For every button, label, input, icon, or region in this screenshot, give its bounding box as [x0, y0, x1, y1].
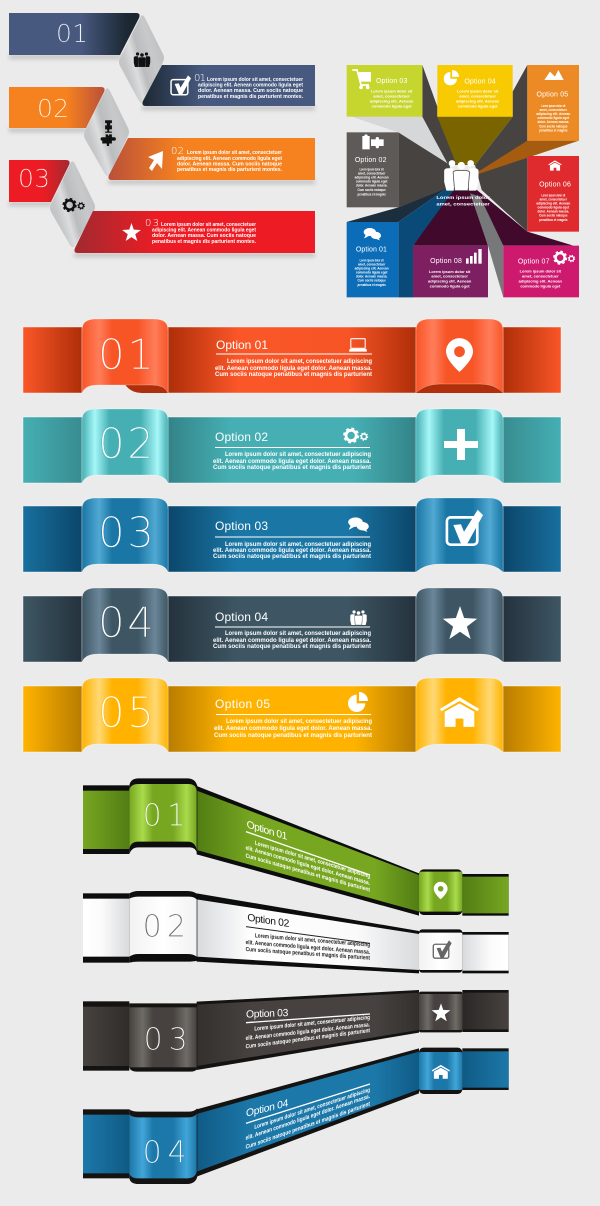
icon: house: [440, 697, 479, 727]
title: Option 03: [215, 519, 268, 533]
box 02: [347, 132, 398, 207]
box 01: Lorem ipsum dolor sit: [360, 258, 384, 262]
band 01: [23, 319, 561, 393]
body text: [213, 541, 372, 560]
icon: puzzle: [101, 120, 116, 146]
icon: laptop: [349, 339, 367, 352]
box 08: Lorem ipsum dolor sit: [429, 270, 471, 274]
body text: Cum sociis natoque penatibus et magnis dis parturient: [215, 371, 373, 378]
box 04: amet, consectetuer: [459, 94, 497, 98]
number: 05: [98, 688, 154, 737]
rule: [246, 1084, 370, 1123]
body text: Cum sociis natoque penatibus et magnis dis parturient: [246, 947, 370, 962]
body text: elit. Aenean commodo ligula eget dolor. Aenean massa.: [246, 1022, 370, 1042]
icon: house: [432, 1065, 450, 1079]
body text: Cum sociis natoque penatibus et magnis dis parturient: [246, 1028, 370, 1050]
body text: [246, 840, 370, 894]
title: Option 02: [215, 430, 268, 444]
box 07: commodo ligula eget: [520, 285, 561, 289]
box 02: Lorem ipsum dolor sit: [360, 168, 384, 172]
box 05: amet, consectetuer: [540, 108, 567, 112]
icon: speech bubbles: [364, 228, 381, 240]
box 01: [347, 222, 398, 297]
text block 02: Lorem ipsum dolor sit amet, consectetuer: [187, 150, 282, 156]
ribbon 02 white: [83, 891, 509, 973]
box 05: adipiscing elit. Aenean: [536, 112, 570, 116]
box 06: [527, 156, 579, 232]
box 04: Lorem ipsum dolor sit: [457, 89, 499, 93]
box 08: Option 08: [430, 258, 462, 265]
box 02: Cum sociis natoque: [357, 188, 386, 192]
box 02: dolor. Aenean massa.: [356, 184, 387, 188]
ribbon step 02: [9, 87, 315, 180]
body text: Lorem ipsum dolor sit amet, consectetuer adipiscing: [255, 933, 370, 949]
box 06: adipiscing elit. Aenean: [536, 201, 570, 205]
rule: [216, 354, 372, 355]
icon: people: [350, 610, 367, 625]
title: Option 05: [215, 697, 270, 711]
icon: people: [134, 52, 150, 67]
body text: Cum sociis natoque penatibus et magnis dis parturient: [213, 643, 372, 650]
box 01: amet, consectetuer: [358, 262, 386, 266]
body text: elit. Aenean commodo ligula eget dolor. Aenean massa.: [246, 1093, 370, 1142]
center text: [436, 195, 490, 207]
box 02: adipiscing elit. Aenean: [355, 176, 389, 180]
icon: pin: [434, 882, 448, 899]
box 07: adipiscing elit. Aenean: [519, 279, 562, 283]
box 02: Option 02: [355, 157, 387, 164]
body text: Lorem ipsum dolor sit amet, consectetuer adipiscing: [254, 1086, 370, 1131]
rule: [246, 1014, 370, 1023]
box 03: Option 03: [376, 78, 407, 85]
title: Option 02: [247, 913, 290, 930]
box 03: Lorem ipsum dolor sit: [371, 89, 413, 93]
rule: [246, 927, 370, 943]
icon: star: [122, 223, 141, 241]
box 02: amet, consectetuer: [358, 172, 386, 176]
title: Option 01: [216, 338, 268, 352]
text block 03: penatibus et magnis dis parturient montes.: [152, 239, 257, 245]
body text: Cum sociis natoque penatibus et magnis dis parturient: [213, 464, 372, 471]
text block 01: Lorem ipsum dolor sit amet, consectetuer: [207, 77, 303, 83]
icon: plus: [444, 429, 478, 460]
ribbon 01 green: [83, 778, 509, 916]
orange wedge: [478, 141, 579, 174]
box 01: Cum sociis natoque: [357, 279, 386, 283]
number: 01: [98, 330, 154, 379]
box 08: amet, consectetuer: [431, 275, 469, 279]
box 07: [503, 246, 579, 297]
icon: mountains: [544, 70, 564, 80]
body text: elit. Aenean commodo ligula eget dolor. Aenean massa.: [213, 458, 371, 465]
yellow wedge: [437, 117, 513, 165]
icon: gears: [554, 252, 575, 264]
box 02: penatibus et magnis: [357, 192, 386, 196]
dark wedges: [422, 65, 462, 165]
rule: [246, 832, 370, 875]
text block 03: Lorem ipsum dolor sit amet, consectetuer: [161, 222, 256, 228]
body text: elit. Aenean commodo ligula eget dolor. Aenean massa.: [214, 725, 372, 732]
light floor: [347, 115, 450, 167]
body text: Lorem ipsum dolor sit amet, consectetuer adipiscing: [225, 541, 371, 548]
box 07: amet, consectetuer: [522, 275, 559, 279]
text block 02: adipiscing elit. Aenean commodo ligula eget: [177, 156, 282, 162]
body text: Cum sociis natoque penatibus et magnis dis parturient: [246, 852, 370, 894]
box 01: adipiscing elit. Aenean: [355, 266, 389, 270]
plum wedges: [413, 188, 573, 246]
box 02: commodo ligula eget: [356, 180, 388, 184]
box 05: dolor. Aenean massa.: [537, 120, 569, 124]
title: Option 01: [247, 819, 287, 843]
body text: [215, 358, 373, 378]
box 03: [347, 65, 422, 117]
icon: cart: [352, 70, 371, 88]
number 02: 02: [37, 94, 69, 123]
box 05: Lorem ipsum dolor sit: [541, 104, 566, 108]
text block 02: 02: [171, 146, 184, 157]
rule: [216, 714, 371, 715]
number: 04: [98, 598, 154, 647]
text block 02: dolor. Aenean massa. Cum sociis natoque: [177, 162, 282, 168]
number: 02: [143, 910, 186, 945]
box 08: [413, 246, 488, 297]
box 05: penatibus et magnis: [539, 129, 567, 133]
body text: [214, 718, 373, 739]
body text: elit. Aenean commodo ligula eget dolor. Aenean massa.: [213, 637, 371, 644]
icon: pie: [348, 692, 368, 712]
navy wedges: [347, 188, 447, 222]
icon: pin: [446, 338, 473, 372]
body text: Lorem ipsum dolor sit amet, consectetuer adipiscing: [227, 358, 372, 365]
center text: amet, consectetuer: [436, 201, 490, 207]
icon: speech bubbles: [348, 517, 369, 532]
box 05: [527, 65, 579, 141]
title: Option 04: [215, 610, 268, 624]
text block 03: adipiscing elit. Aenean commodo ligula eget: [152, 228, 256, 234]
box 06: penatibus et magnis: [539, 218, 567, 222]
icon: bars: [466, 249, 482, 264]
text block 02: [171, 146, 283, 173]
box 06: Lorem ipsum dolor sit: [541, 193, 566, 197]
box 01: Option 01: [356, 247, 387, 254]
grey wedge: [470, 193, 503, 297]
number 01: 01: [56, 19, 88, 48]
number: 02: [98, 419, 154, 468]
body text: Lorem ipsum dolor sit amet, consectetuer adipiscing: [225, 451, 371, 458]
box 03: adipiscing elit. Aenean: [370, 99, 413, 103]
box 03: amet, consectetuer: [373, 94, 411, 98]
box 01: dolor. Aenean massa.: [356, 274, 387, 278]
band 04: [23, 588, 561, 662]
number: 03: [144, 1023, 188, 1058]
body text: Lorem ipsum dolor sit amet, consectetuer adipiscing: [254, 1015, 370, 1033]
box 04: adipiscing elit. Aenean: [456, 99, 499, 103]
center people icon: [444, 160, 479, 191]
box 06: dolor. Aenean massa.: [537, 209, 569, 213]
body text: Lorem ipsum dolor sit amet, consectetuer adipiscing: [226, 718, 372, 725]
box 08: commodo ligula eget: [430, 285, 471, 289]
text block 03: dolor. Aenean massa. Cum sociis natoque: [152, 233, 256, 239]
rule: [215, 447, 370, 448]
icon: star: [432, 1003, 450, 1021]
box 04: Option 04: [464, 78, 496, 85]
icon: house: [548, 160, 562, 171]
box 05: Option 05: [536, 91, 568, 98]
icon: arrow: [148, 151, 163, 171]
title: Option 04: [246, 1098, 288, 1120]
text block 01: adipiscing elit. Aenean commodo ligula eget: [198, 82, 303, 88]
body text: Lorem ipsum dolor sit amet, consectetuer adipiscing: [225, 630, 371, 637]
body text: elit. Aenean commodo ligula eget dolor. Aenean massa.: [246, 844, 370, 887]
box 06: Option 06: [539, 182, 571, 189]
body text: elit. Aenean commodo ligula eget dolor. Aenean massa.: [213, 547, 371, 554]
box 06: Cum sociis natoque: [539, 214, 567, 218]
box 04: [437, 65, 513, 117]
text block 01: 01: [194, 73, 206, 84]
number: 01: [143, 798, 186, 833]
title: Option 03: [246, 1008, 289, 1021]
body text: Cum sociis natoque penatibus et magnis dis parturient: [213, 553, 372, 560]
box 07: Option 07: [518, 259, 550, 266]
center text: Lorem ipsum dolor: [436, 195, 490, 201]
box 06: amet, consectetuer: [540, 197, 567, 201]
icon: pie: [444, 70, 459, 85]
band 02: [23, 409, 561, 483]
shadows: [9, 55, 315, 257]
icon: star: [443, 606, 477, 639]
box 08: adipiscing elit. Aenean: [428, 279, 471, 283]
text block 03: 03: [145, 218, 159, 229]
text block 01: penatibus et magnis dis parturient montes.: [198, 94, 304, 100]
band 05: [23, 678, 561, 752]
icon: check: [433, 940, 452, 959]
ribbon step 01: [9, 13, 315, 106]
text block 02: penatibus et magnis dis parturient montes.: [177, 167, 283, 173]
body text: elit. Aenean commodo ligula eget dolor. Aenean massa.: [215, 365, 372, 372]
box 05: commodo ligula eget: [537, 116, 570, 120]
panel: diagonal step ribbons: [9, 13, 315, 257]
number 03: 03: [18, 164, 50, 193]
text block 03: [145, 218, 257, 245]
rule: [215, 536, 370, 538]
box 04: commodo ligula eget: [458, 104, 499, 108]
icon: check: [447, 510, 483, 545]
rule: [215, 626, 370, 628]
icon: gears: [63, 199, 84, 211]
box 01: commodo ligula eget: [356, 270, 388, 274]
body text: Cum sociis natoque penatibus et magnis dis parturient: [246, 1101, 370, 1151]
text block 01: [194, 73, 304, 100]
body text: [213, 630, 372, 650]
box 01: penatibus et magnis: [357, 283, 386, 287]
number: 04: [143, 1135, 187, 1170]
body text: Cum sociis natoque penatibus et magnis dis parturient: [214, 732, 373, 739]
body text: elit. Aenean commodo ligula eget dolor. Aenean massa.: [246, 940, 370, 956]
panel: perspective boxes: [347, 65, 579, 297]
box 06: commodo ligula eget: [537, 205, 570, 209]
ribbon 04 blue: [83, 1048, 509, 1184]
number: 03: [98, 508, 154, 557]
ribbon 03 dark: [83, 990, 509, 1072]
body text: [246, 933, 370, 962]
body text: [213, 451, 372, 471]
body text: Lorem ipsum dolor sit amet, consectetuer adipiscing: [255, 840, 370, 880]
ribbon step 03: [9, 160, 315, 253]
icon: puzzle: [362, 134, 384, 149]
band 03: [23, 498, 561, 572]
box 03: commodo ligula eget: [372, 104, 413, 108]
box 05: Cum sociis natoque: [539, 124, 567, 128]
box 07: Lorem ipsum dolor sit: [520, 270, 562, 274]
text block 01: dolor. Aenean massa. Cum sociis natoque: [198, 88, 303, 94]
icon: check: [171, 75, 191, 95]
icon: gears: [344, 429, 368, 442]
body text: [246, 1015, 370, 1050]
